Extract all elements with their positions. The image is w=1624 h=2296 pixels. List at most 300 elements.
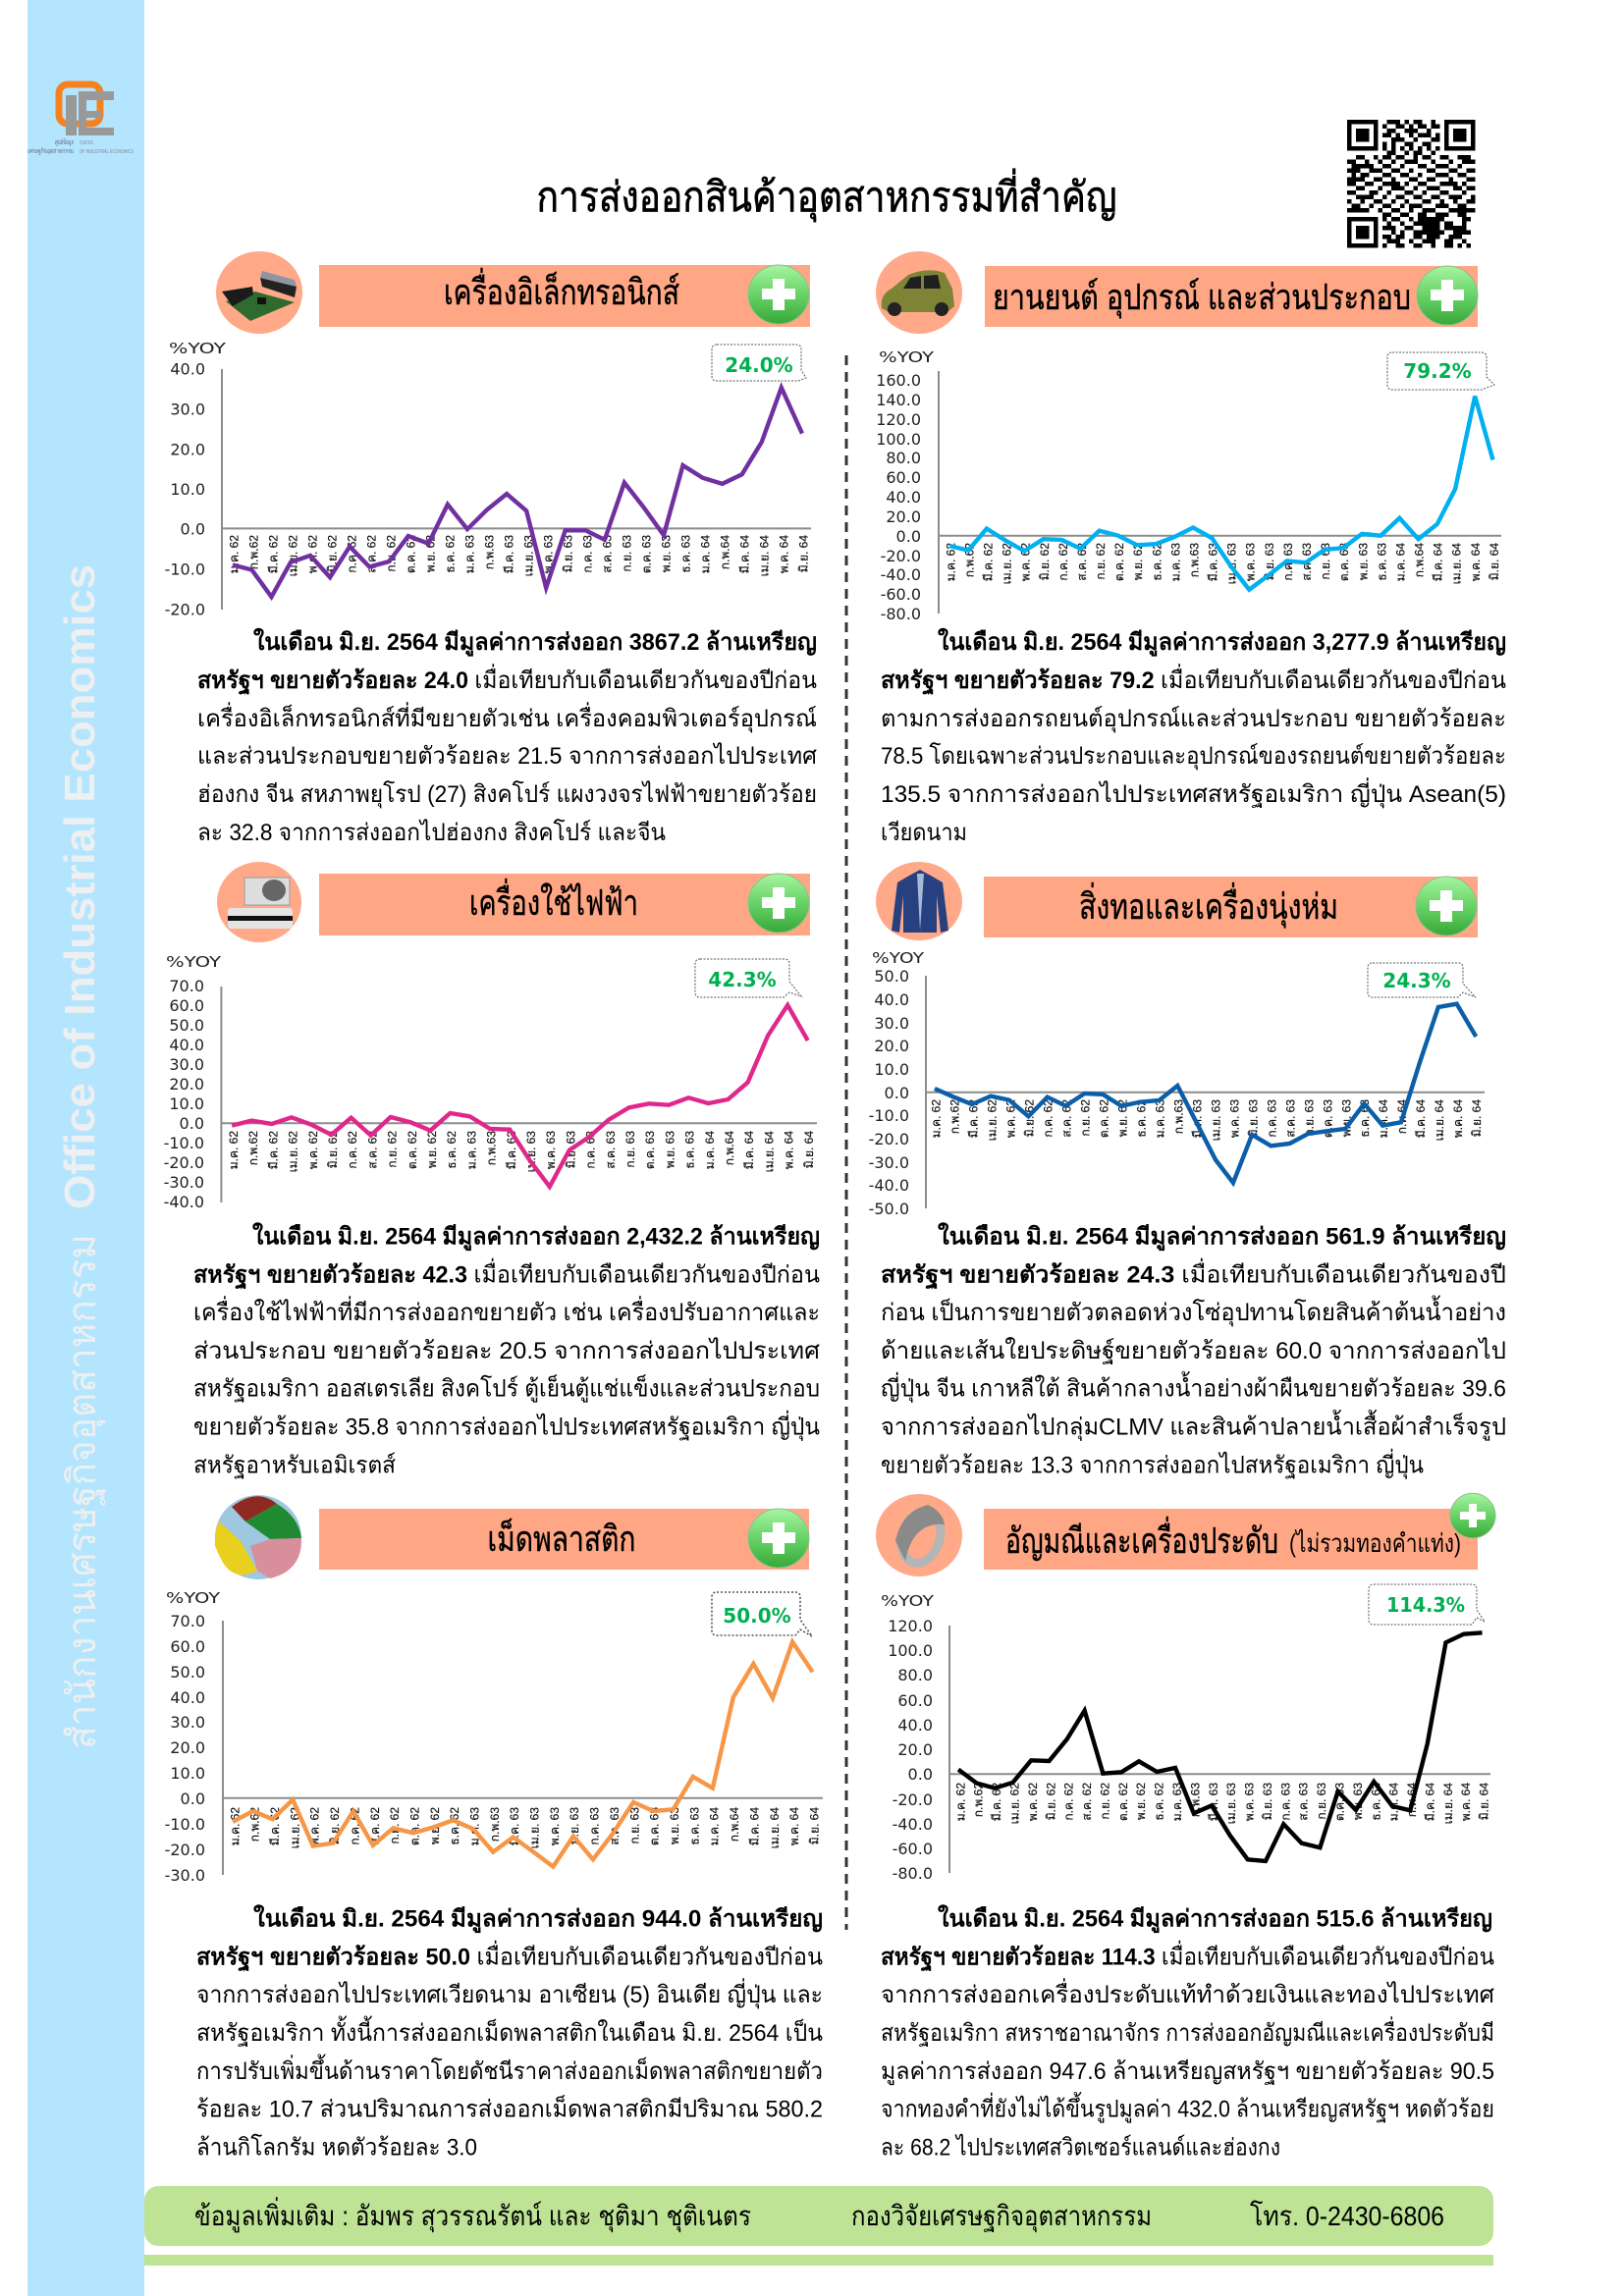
x axis labels: เม.ย. 63	[1209, 1099, 1222, 1141]
heading: เครื่องใช้ไฟฟ้า	[469, 879, 638, 923]
y axis labels: -20.0	[164, 1153, 204, 1172]
x axis labels: พ.ค. 63	[1243, 1783, 1257, 1821]
x axis labels: ก.ย. 62	[1094, 543, 1108, 580]
y axis labels: -30.0	[164, 1173, 204, 1192]
y axis labels: 30.0	[170, 1713, 205, 1732]
callout	[1387, 352, 1494, 390]
x axis labels: ก.พ.63	[483, 535, 497, 569]
axes	[939, 371, 1501, 614]
y axis labels: 50.0	[169, 1016, 204, 1035]
x axis labels: มี.ค. 62	[266, 1131, 280, 1169]
x axis labels: ต.ค. 62	[407, 1807, 421, 1845]
body text: เครื่องอิเล็กทรอนิกส์ที่มีขยายตัวเช่น เครื่องคอมพิวเตอร์อุปกรณ์	[197, 702, 817, 733]
panel: textiles and garments	[869, 862, 1506, 1479]
body text: เวียดนาม	[881, 820, 967, 846]
x axis labels: ก.ค. 63	[1278, 1783, 1292, 1821]
x axis labels: มี.ค. 63	[503, 535, 516, 573]
x axis labels: ต.ค. 62	[1112, 543, 1126, 581]
body text: ตามการส่งออกรถยนต์อุปกรณ์และส่วนประกอบ ขยายตัวร้อยละ	[881, 705, 1506, 733]
x axis labels: พ.ย. 63	[663, 1131, 677, 1168]
x axis labels: พ.ค. 64	[1451, 1099, 1465, 1138]
y axis labels: 10.0	[169, 1095, 204, 1113]
icon: plus badge	[1416, 877, 1477, 935]
logo: ศูนย์ข้อมูล	[55, 138, 74, 146]
y axis labels: 40.0	[170, 360, 205, 379]
body text: จากการส่งออกไปกลุ่มCLMV และสินค้าปลายน้ำเสื้อผ้าสำเร็จรูป	[881, 1410, 1506, 1441]
x axis labels: ก.พ.62	[248, 1807, 262, 1842]
x axis labels: มี.ค. 64	[738, 535, 752, 573]
x axis labels: พ.ย. 63	[660, 535, 674, 572]
y axis labels: 60.0	[886, 468, 921, 487]
x axis labels: มี.ค. 64	[1432, 543, 1445, 581]
x axis labels: ก.ย. 63	[1302, 1099, 1316, 1137]
x axis labels: มิ.ย. 62	[328, 1807, 342, 1844]
y axis labels: 0.0	[885, 1084, 909, 1102]
body text: ญี่ปุ่น จีน เกาหลีใต้ สินค้ากลางน้ำอย่างผ้าผืนขยายตัวร้อยละ 39.6	[881, 1371, 1506, 1404]
body text: และส่วนประกอบขยายตัวร้อยละ 21.5 จากการส่งออกไปประเทศ	[197, 742, 817, 770]
y axis labels: 80.0	[886, 449, 921, 467]
x axis labels: ธ.ค. 62	[1153, 1783, 1166, 1821]
x axis labels: ม.ค. 62	[228, 1807, 242, 1845]
y axis labels: 60.0	[169, 996, 204, 1015]
x axis labels	[930, 1099, 1484, 1141]
y axis labels: 30.0	[170, 400, 205, 419]
icon: plus badge	[1417, 266, 1478, 325]
x axis labels: ต.ค. 63	[643, 1131, 657, 1169]
axes	[223, 1621, 823, 1875]
x axis labels: ก.พ.64	[1395, 1099, 1409, 1134]
x axis labels: ส.ค. 63	[604, 1131, 618, 1169]
y axis labels: 50.0	[874, 967, 909, 986]
x axis labels: ม.ค. 63	[1170, 1783, 1184, 1821]
x axis labels	[228, 1807, 821, 1848]
logo: CENTER	[80, 140, 93, 146]
callout	[712, 1592, 812, 1636]
x axis labels: ก.ค. 62	[1056, 543, 1070, 581]
x axis labels: ก.ย. 62	[386, 1131, 400, 1168]
QR code	[1347, 120, 1475, 247]
x axis labels: เม.ย. 63	[1225, 543, 1239, 584]
x axis labels: ม.ค. 63	[467, 1807, 481, 1845]
body text: สหรัฐอาหรับเอมิเรตส์	[193, 1451, 396, 1478]
body text: การปรับเพิ่มขึ้นด้านราคาโดยดัชนีราคาส่งออกเม็ดพลาสติกขยายตัว	[196, 2054, 823, 2085]
body text: 78.5 โดยเฉพาะส่วนประกอบและอุปกรณ์ของรถยนต์ขยายตัวร้อยละ	[881, 742, 1506, 771]
x axis labels: ธ.ค. 63	[683, 1131, 697, 1169]
y axis labels: -40.0	[164, 1193, 204, 1211]
x axis labels: ก.ย. 63	[1315, 1783, 1328, 1820]
data line	[958, 1632, 1483, 1861]
footer contact bar	[144, 2186, 1493, 2246]
y axis labels	[876, 371, 921, 623]
x axis labels: ม.ค. 63	[1153, 1099, 1166, 1138]
y axis labels: 70.0	[169, 977, 204, 995]
x axis labels: ธ.ค. 63	[1358, 1099, 1372, 1138]
x axis labels: พ.ค. 63	[544, 1131, 558, 1169]
body text: สหรัฐฯ ขยายตัวร้อยละ 79.2 เมื่อเทียบกับเดือนเดียวกันของปีก่อน	[881, 664, 1506, 696]
chart	[869, 949, 1485, 1218]
y axis labels: 40.0	[874, 990, 909, 1009]
x axis labels: ม.ค. 64	[708, 1807, 722, 1845]
x axis labels: มี.ค. 62	[990, 1783, 1003, 1821]
x axis labels: ก.พ.63	[488, 1807, 502, 1842]
icon: car	[876, 251, 962, 334]
y axis labels: 20.0	[874, 1037, 909, 1055]
x axis labels: มิ.ย. 64	[1488, 543, 1501, 580]
y axis labels: -50.0	[869, 1200, 909, 1218]
x axis labels: ก.พ.63	[1188, 543, 1202, 577]
x axis labels: ม.ค. 64	[1394, 543, 1408, 581]
y axis labels: 40.0	[886, 488, 921, 507]
heading note: (ไม่รวมทองคำแท่ง)	[1289, 1528, 1461, 1558]
header bar	[319, 874, 810, 935]
panel: electronics	[165, 251, 817, 846]
y axis labels: 0.0	[181, 1789, 205, 1808]
icon: air conditioner	[217, 862, 301, 942]
y axis labels: 20.0	[169, 1075, 204, 1094]
y axis labels: 100.0	[876, 430, 921, 449]
x axis labels: ก.พ.64	[728, 1807, 741, 1842]
logo	[27, 84, 135, 155]
body text: ขยายตัวร้อยละ 35.8 จากการส่งออกไปประเทศสหรัฐอเมริกา ญี่ปุ่น	[193, 1410, 820, 1441]
body text: ขยายตัวร้อยละ 13.3 จากการส่งออกไปสหรัฐอเมริกา ญี่ปุ่น	[881, 1448, 1424, 1479]
y axis labels: -20.0	[893, 1790, 933, 1809]
body text: สหรัฐฯ ขยายตัวร้อยละ 50.0 เมื่อเทียบกับเดือนเดียวกันของปีก่อน	[196, 1940, 823, 1972]
icon: ring	[876, 1494, 962, 1576]
x axis labels: พ.ย. 63	[1351, 1783, 1365, 1820]
header bar	[984, 877, 1478, 937]
panel: automotive	[876, 251, 1506, 846]
x axis labels: ก.พ.64	[723, 1131, 736, 1165]
x axis labels: เม.ย. 62	[287, 535, 300, 576]
x axis labels: มี.ค. 63	[1190, 1099, 1204, 1138]
x axis labels: ม.ค. 63	[463, 535, 477, 573]
x axis labels: มิ.ย. 63	[1261, 1783, 1274, 1820]
x axis labels: ส.ค. 62	[365, 535, 379, 573]
column divider	[844, 355, 848, 1930]
axis title: %YOY	[879, 348, 935, 366]
y axis labels: 0.0	[908, 1765, 933, 1784]
axis title: %YOY	[166, 1589, 221, 1607]
footer strip	[144, 2255, 1493, 2266]
x axis labels: ม.ค. 62	[944, 543, 957, 581]
x axis labels: เม.ย. 62	[288, 1807, 301, 1848]
x axis labels: เม.ย. 63	[524, 1131, 538, 1172]
x axis labels: ต.ค. 62	[405, 535, 418, 573]
icon: plus badge	[748, 874, 809, 933]
x axis labels: ต.ค. 62	[406, 1131, 419, 1169]
axes	[949, 1626, 1490, 1873]
x axis labels: มิ.ย. 63	[564, 1131, 577, 1168]
callout: 24.3%	[1382, 969, 1451, 992]
y axis labels: 10.0	[170, 1764, 205, 1783]
x axis labels: พ.ค. 63	[1244, 543, 1258, 581]
y axis labels: -20.0	[881, 547, 921, 565]
y axis labels: -60.0	[893, 1840, 933, 1858]
x axis labels: ม.ค. 64	[1387, 1783, 1401, 1821]
x axis labels: ก.ย. 63	[623, 1131, 637, 1168]
x axis labels: พ.ย. 62	[428, 1807, 442, 1844]
y axis labels: 20.0	[886, 507, 921, 526]
x axis labels: พ.ย. 63	[668, 1807, 681, 1844]
y axis labels: 10.0	[170, 480, 205, 499]
axis title: %YOY	[881, 1592, 935, 1610]
body text: จากทองคำที่ยังไม่ได้ขึ้นรูปมูลค่า 432.0 ล้านเหรียญสหรัฐฯ หดตัวร้อย	[881, 2092, 1494, 2124]
data line	[232, 1005, 808, 1187]
x axis labels: พ.ค. 62	[1026, 1783, 1040, 1821]
sidebar English title: Office of Industrial Economics	[56, 564, 104, 1209]
y axis labels: 20.0	[897, 1740, 933, 1759]
x axis labels: เม.ย. 62	[1007, 1783, 1021, 1824]
sidebar	[27, 0, 144, 2296]
body text: เครื่องใช้ไฟฟ้าที่มีการส่งออกขยายตัว เช่น เครื่องปรับอากาศและ	[193, 1296, 820, 1326]
x axis labels: ธ.ค. 62	[1135, 1099, 1149, 1138]
y axis labels: -30.0	[165, 1866, 205, 1885]
x axis labels: ต.ค. 63	[1337, 543, 1351, 581]
y axis labels: -20.0	[869, 1130, 909, 1148]
y axis labels: -20.0	[165, 1841, 205, 1859]
x axis labels: ก.ย. 63	[621, 535, 634, 572]
icon: shirt	[876, 862, 962, 940]
x axis labels: มี.ค. 63	[1207, 543, 1220, 581]
body text	[193, 1221, 820, 1478]
x axis labels: ก.ย. 62	[385, 535, 399, 572]
y axis labels	[164, 977, 204, 1211]
x axis labels: พ.ค. 62	[1019, 543, 1033, 581]
chart	[881, 1584, 1491, 1883]
callout: 114.3%	[1386, 1593, 1465, 1617]
y axis labels: -80.0	[881, 605, 921, 623]
heading: อัญมณีและเครื่องประดับ	[1005, 1517, 1278, 1561]
x axis labels: ก.พ.63	[485, 1131, 499, 1165]
x axis labels: มิ.ย. 64	[807, 1807, 821, 1844]
x axis labels: เม.ย. 64	[1450, 543, 1464, 584]
x axis labels: มิ.ย. 64	[1470, 1099, 1484, 1137]
y axis labels: 50.0	[170, 1663, 205, 1682]
x axis labels: ก.ค. 62	[1062, 1783, 1076, 1821]
x axis labels: ก.พ.62	[962, 543, 976, 577]
body text	[197, 627, 817, 846]
y axis labels: 40.0	[170, 1688, 205, 1707]
x axis labels: ส.ค. 62	[365, 1131, 379, 1169]
y axis labels: 0.0	[181, 519, 205, 538]
x axis labels: ก.ค. 63	[1281, 543, 1295, 581]
x axis labels: ก.ย. 63	[1319, 543, 1332, 580]
body text: ในเดือน มิ.ย. 2564 มีมูลค่าการส่งออก 3867.2 ล้านเหรียญ	[253, 627, 817, 657]
y axis labels	[888, 1617, 933, 1883]
x axis labels: พ.ค. 64	[783, 1131, 796, 1169]
x axis labels: ธ.ค. 62	[448, 1807, 461, 1845]
x axis labels: พ.ย. 63	[1356, 543, 1370, 580]
body text: ฮ่องกง จีน สหภาพยุโรป (27) สิงคโปร์ แผงวงจรไฟฟ้าขยายตัวร้อย	[197, 780, 817, 809]
x axis labels: ก.พ.62	[972, 1783, 986, 1817]
x axis labels: ส.ค. 63	[608, 1807, 622, 1845]
body text: สหรัฐฯ ขยายตัวร้อยละ 24.3 เมื่อเทียบกับเดือนเดียวกันของปี	[881, 1257, 1506, 1290]
x axis labels	[953, 1783, 1491, 1824]
x axis labels: มิ.ย. 64	[802, 1131, 816, 1168]
x axis labels: พ.ย. 62	[1131, 543, 1145, 580]
x axis labels: พ.ค. 62	[308, 1807, 322, 1845]
x axis labels: มิ.ย. 63	[568, 1807, 581, 1844]
y axis labels: 10.0	[874, 1060, 909, 1079]
body text: ร้อยละ 10.7 ส่วนปริมาณการส่งออกเม็ดพลาสติกมีปริมาณ 580.2	[196, 2095, 823, 2123]
body text: จากการส่งออกไปประเทศเวียดนาม อาเซียน (5) อินเดีย ญี่ปุ่น และ	[196, 1978, 823, 2009]
x axis labels: ก.ค. 63	[1265, 1099, 1278, 1138]
x axis labels: มี.ค. 62	[982, 543, 996, 581]
y axis labels: -40.0	[869, 1176, 909, 1195]
y axis labels: -10.0	[165, 1815, 205, 1834]
logo: เศรษฐกิจอุตสาหกรรม	[27, 147, 74, 155]
department: กองวิจัยเศรษฐกิจอุตสาหกรรม	[851, 2201, 1152, 2233]
body text: ในเดือน มิ.ย. 2564 มีมูลค่าการส่งออก 3,277.9 ล้านเหรียญ	[938, 627, 1506, 657]
y axis labels: 0.0	[180, 1114, 204, 1133]
heading: เม็ดพลาสติก	[487, 1517, 636, 1559]
body text	[881, 1221, 1506, 1479]
x axis labels: ก.ย. 63	[627, 1807, 641, 1844]
x axis labels	[227, 1131, 816, 1172]
callout: 79.2%	[1403, 359, 1472, 383]
y axis labels: 0.0	[896, 527, 921, 546]
data line	[233, 1642, 813, 1867]
body text: ละ 68.2 ไปประเทศสวิตเซอร์แลนด์และฮ่องกง	[881, 2133, 1280, 2161]
header bar	[985, 266, 1478, 327]
y axis labels: -30.0	[869, 1153, 909, 1172]
x axis labels: พ.ย. 62	[1134, 1783, 1148, 1820]
x axis labels: ต.ค. 63	[640, 535, 654, 573]
y axis labels: 60.0	[170, 1637, 205, 1656]
y axis labels: 40.0	[169, 1036, 204, 1054]
x axis labels: ธ.ค. 63	[1369, 1783, 1382, 1821]
x axis labels: ก.พ.64	[1413, 543, 1427, 577]
x axis labels: มี.ค. 62	[268, 1807, 282, 1845]
y axis labels: 20.0	[170, 1738, 205, 1757]
x axis labels: ก.พ.63	[1188, 1783, 1202, 1817]
x axis labels: ต.ค. 63	[1333, 1783, 1347, 1821]
x axis labels: ธ.ค. 62	[445, 1131, 459, 1169]
y axis labels: 60.0	[897, 1691, 933, 1710]
body text: 135.5 จากการส่งออกไปประเทศสหรัฐอเมริกา ญี่ปุ่น Asean(5)	[881, 777, 1506, 809]
x axis labels: มิ.ย. 62	[326, 1131, 340, 1168]
axes	[221, 987, 817, 1202]
x axis labels: ต.ค. 62	[1116, 1783, 1130, 1821]
x axis labels: พ.ค. 64	[787, 1807, 801, 1845]
x axis labels: ก.ย. 62	[1078, 1099, 1092, 1137]
body text: สหรัฐอเมริกา ออสเตรเลีย สิงคโปร์ ตู้เย็นตู้แช่แข็งและส่วนประกอบ	[193, 1374, 820, 1404]
x axis labels: พ.ย. 62	[1115, 1099, 1129, 1137]
icon: plastic pellets	[215, 1495, 301, 1579]
x axis labels: เม.ย. 63	[522, 535, 536, 576]
x axis labels: ธ.ค. 62	[1150, 543, 1164, 581]
y axis labels	[165, 360, 205, 619]
sidebar Thai title: สำนักงานเศรษฐกิจอุตสาหกรรม	[61, 1234, 106, 1749]
x axis labels: มี.ค. 64	[742, 1131, 756, 1169]
chart	[164, 953, 817, 1211]
header bar	[984, 1509, 1478, 1570]
x axis labels: เม.ย. 62	[287, 1131, 300, 1172]
x axis labels: มี.ค. 64	[747, 1807, 761, 1845]
x axis labels: ม.ค. 64	[1377, 1099, 1390, 1138]
heading: สิ่งทอและเครื่องนุ่งห่ม	[1079, 882, 1338, 929]
x axis labels: ก.ค. 63	[584, 1131, 598, 1169]
axis title: %YOY	[872, 949, 925, 967]
x axis labels: ก.พ.62	[948, 1099, 962, 1134]
body text: ล้านกิโลกรัม หดตัวร้อยละ 3.0	[196, 2133, 477, 2161]
x axis labels: ส.ค. 63	[1283, 1099, 1297, 1138]
y axis labels: -40.0	[881, 565, 921, 584]
chart	[876, 348, 1501, 623]
x axis labels: พ.ค. 62	[306, 1131, 320, 1169]
body text: สหรัฐอเมริกา สหราชอาณาจักร การส่งออกอัญมณีและเครื่องประดับมี	[881, 2016, 1494, 2047]
axes	[926, 976, 1485, 1208]
x axis labels: มิ.ย. 63	[562, 535, 575, 572]
callout: 50.0%	[723, 1604, 791, 1628]
y axis labels: 30.0	[874, 1014, 909, 1033]
x axis labels: มี.ค. 63	[1207, 1783, 1220, 1821]
body text	[881, 1904, 1494, 2161]
x axis labels: ต.ค. 63	[648, 1807, 662, 1845]
axis title: %YOY	[166, 953, 222, 971]
x axis labels: ส.ค. 62	[1060, 1099, 1074, 1138]
body text: ในเดือน มิ.ย. 2564 มีมูลค่าการส่งออก 561.9 ล้านเหรียญ	[938, 1221, 1506, 1251]
x axis labels: พ.ค. 63	[548, 1807, 562, 1845]
axis title: %YOY	[169, 340, 227, 357]
x axis labels: ม.ค. 63	[1168, 543, 1182, 581]
x axis labels: ก.พ.64	[719, 535, 732, 569]
x axis labels: ม.ค. 62	[228, 535, 242, 573]
x axis labels: ม.ค. 63	[464, 1131, 478, 1169]
x axis labels: ม.ค. 64	[703, 1131, 717, 1169]
data line	[935, 1004, 1476, 1183]
x axis labels: มิ.ย. 62	[1038, 543, 1052, 580]
x axis labels: พ.ค. 62	[306, 535, 320, 573]
body text: สหรัฐฯ ขยายตัวร้อยละ 24.0 เมื่อเทียบกับเดือนเดียวกันของปีก่อน	[197, 664, 817, 696]
x axis labels: มี.ค. 64	[1423, 1783, 1436, 1821]
x axis labels: ม.ค. 64	[699, 535, 713, 573]
y axis labels: -10.0	[164, 1134, 204, 1152]
y axis labels: 80.0	[897, 1666, 933, 1684]
body text: ด้ายและเส้นใยประดิษฐ์ขยายตัวร้อยละ 60.0 จากการส่งออกไป	[881, 1337, 1506, 1364]
x axis labels: เม.ย. 64	[768, 1807, 782, 1848]
icon: circuit board	[216, 251, 302, 334]
x axis labels: มิ.ย. 63	[1246, 1099, 1260, 1137]
x axis labels: พ.ค. 62	[1004, 1099, 1018, 1138]
x axis labels: เม.ย. 63	[528, 1807, 542, 1848]
x axis labels: ก.ค. 62	[346, 535, 359, 573]
x axis labels: พ.ย. 62	[424, 535, 438, 572]
y axis labels: 140.0	[876, 391, 921, 409]
callout	[712, 345, 806, 381]
x axis labels: ส.ค. 62	[368, 1807, 382, 1845]
x axis labels: เม.ย. 62	[986, 1099, 1000, 1141]
y axis labels: -80.0	[893, 1864, 933, 1883]
callout	[1368, 963, 1476, 997]
x axis labels: ธ.ค. 63	[679, 535, 693, 573]
x axis labels	[944, 543, 1501, 584]
y axis labels: 40.0	[897, 1716, 933, 1735]
x axis labels: พ.ค. 64	[1469, 543, 1483, 581]
x axis labels: ก.ย. 62	[388, 1807, 402, 1844]
x axis labels: ม.ค. 62	[227, 1131, 241, 1169]
x axis labels: ก.ค. 62	[1042, 1099, 1056, 1138]
x axis labels: พ.ค. 63	[542, 535, 556, 573]
x axis labels: เม.ย. 64	[762, 1131, 776, 1172]
body text: สหรัฐฯ ขยายตัวร้อยละ 114.3 เมื่อเทียบกับเดือนเดียวกันของปีก่อน	[881, 1940, 1494, 1972]
logo: OF INDUSTRIAL ECONOMICS	[80, 149, 135, 155]
heading: ยานยนต์ อุปกรณ์ และส่วนประกอบ	[993, 277, 1411, 319]
x axis labels: ก.ค. 62	[346, 1131, 359, 1169]
x axis labels: พ.ย. 63	[1339, 1099, 1353, 1137]
x axis labels: มี.ค. 62	[267, 535, 281, 573]
contact label and names: ข้อมูลเพิ่มเติม : อัมพร สุวรรณรัตน์ และ ชุติมา ชุติเนตร	[194, 2197, 751, 2233]
